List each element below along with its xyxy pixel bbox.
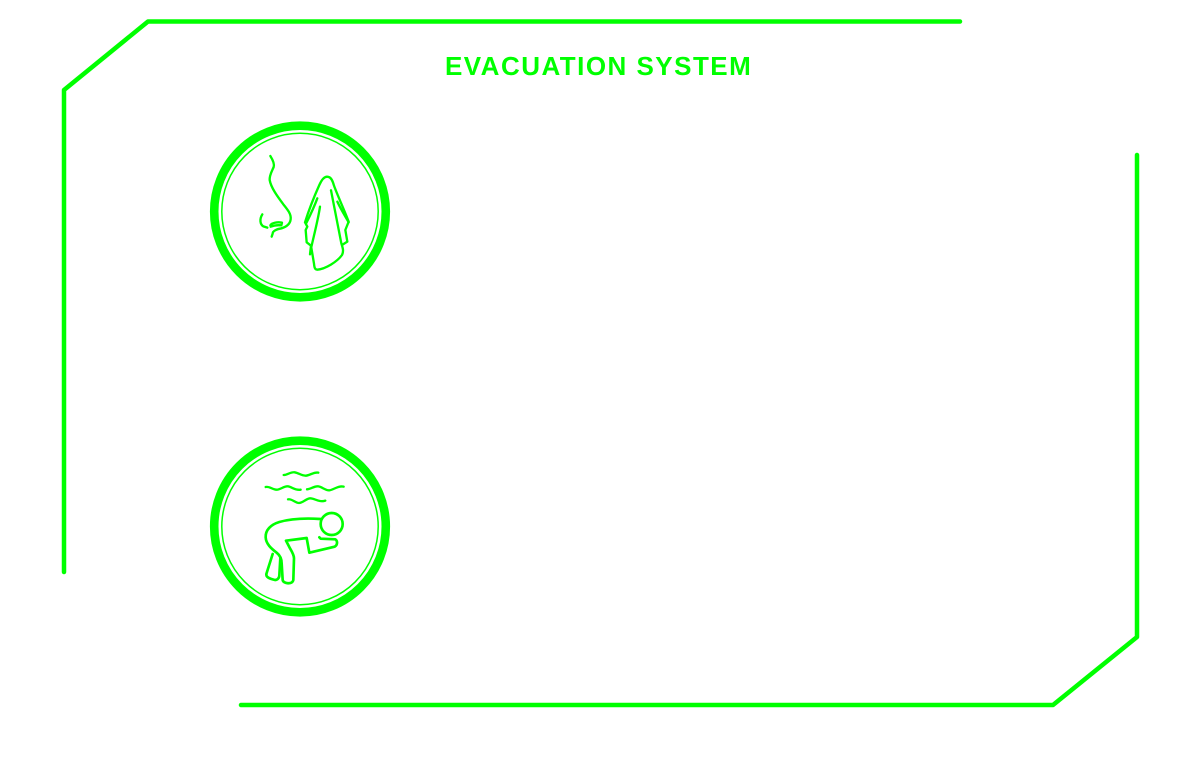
frame: top-left bracket — [64, 22, 960, 572]
badge outer ring — [214, 126, 386, 297]
badge inner ring — [222, 133, 378, 290]
badge outer ring — [214, 441, 386, 612]
icon: nose — [260, 156, 291, 237]
icon: nose and towel badge — [214, 126, 386, 297]
icon: smoke waves — [266, 472, 344, 503]
badge inner ring — [222, 448, 378, 605]
icon: bent-over person — [266, 513, 343, 583]
icon: towel — [305, 177, 349, 270]
title: EVACUATION SYSTEM — [445, 53, 751, 81]
icon: person coughing under smoke badge — [214, 441, 386, 612]
frame: bottom-right bracket — [241, 155, 1137, 705]
